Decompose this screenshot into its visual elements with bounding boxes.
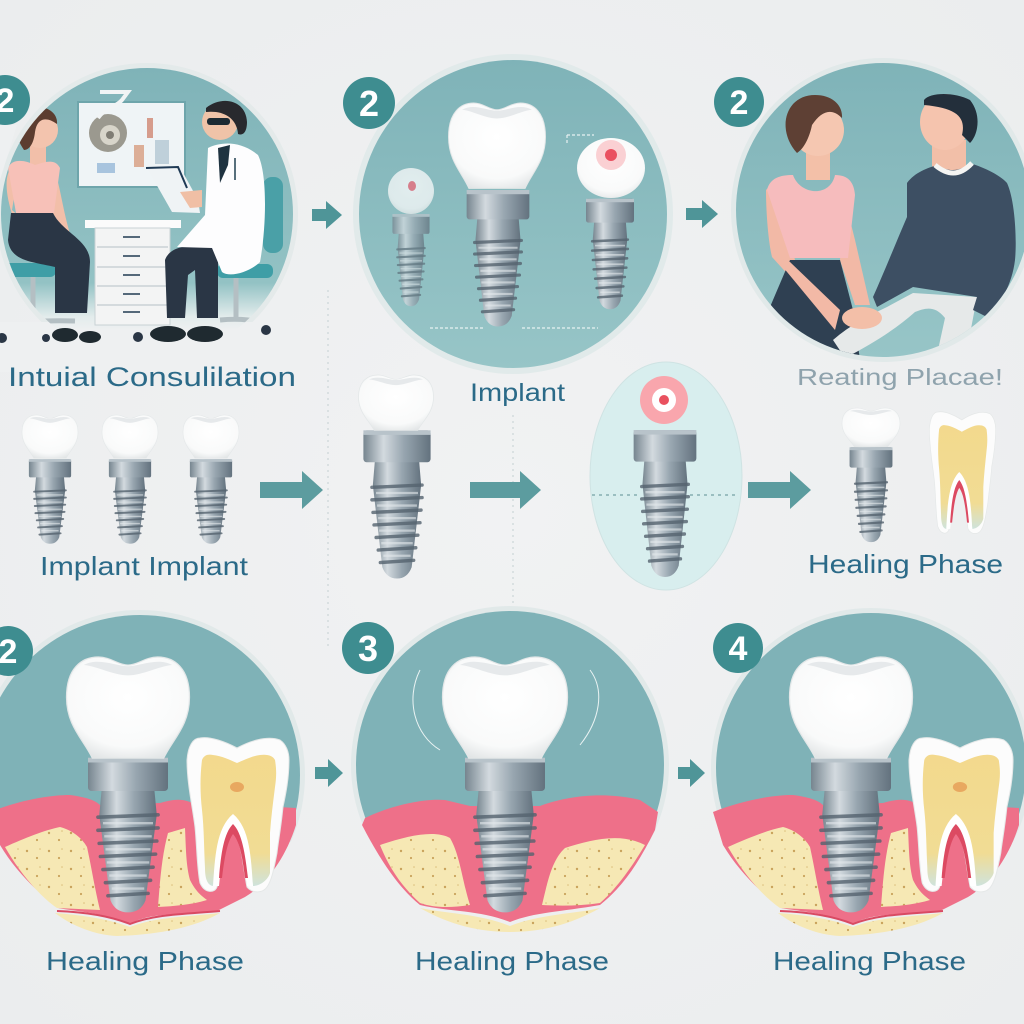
cabinet xyxy=(85,220,181,325)
small marks xyxy=(430,135,598,328)
badge 2: 2 xyxy=(359,83,379,124)
label: implant implant: Implant Implant xyxy=(40,551,249,581)
large implant xyxy=(358,375,434,579)
badge 2 xyxy=(343,77,395,129)
dotted guides xyxy=(328,290,513,650)
label: implant: Implant xyxy=(470,379,565,407)
label: consultation: Intuial Consulilation xyxy=(8,362,296,392)
arrow xyxy=(678,759,705,787)
arrow xyxy=(686,200,718,228)
badge xyxy=(0,626,33,676)
wall poster xyxy=(78,92,185,187)
badge 2: 2 xyxy=(730,84,748,122)
centre implant xyxy=(448,103,546,326)
small implant xyxy=(842,408,900,542)
label: healing: Healing Phase xyxy=(773,946,966,976)
doctor xyxy=(146,101,265,318)
swoosh xyxy=(0,125,17,180)
natural tooth xyxy=(929,412,996,534)
arrow xyxy=(748,471,811,509)
badge 2 xyxy=(0,75,30,125)
patient xyxy=(7,107,90,313)
panel: implant trio xyxy=(353,54,673,374)
badge 4 xyxy=(713,623,763,673)
shoes xyxy=(52,326,223,343)
panel: healing 2 xyxy=(351,606,669,932)
badge 3: 3 xyxy=(358,628,378,669)
left implant xyxy=(388,168,434,306)
doctor chair xyxy=(217,177,283,325)
panel: healing 3 xyxy=(711,608,1024,936)
arrow xyxy=(312,201,342,229)
label: healing: Healing Phase xyxy=(46,946,244,976)
arrow xyxy=(315,759,343,787)
oval implant xyxy=(590,362,742,590)
panel: couple xyxy=(731,58,1024,362)
label: healing: Healing Phase xyxy=(808,549,1003,579)
label: placement: Reating Placae! xyxy=(797,364,1003,390)
man xyxy=(833,94,1016,358)
badge 4: 4 xyxy=(729,630,748,668)
patient chair xyxy=(10,263,75,324)
right implant xyxy=(577,138,645,309)
label: healing: Healing Phase xyxy=(415,946,609,976)
panel: healing 1 xyxy=(0,610,305,940)
casters xyxy=(0,325,271,343)
arrow xyxy=(470,471,541,509)
badge 3 xyxy=(342,622,394,674)
hands xyxy=(842,307,882,329)
woman xyxy=(766,95,870,360)
badge 2 xyxy=(714,77,764,127)
implant row xyxy=(22,415,239,544)
panel: consultation xyxy=(0,63,300,372)
arrow xyxy=(260,471,323,509)
